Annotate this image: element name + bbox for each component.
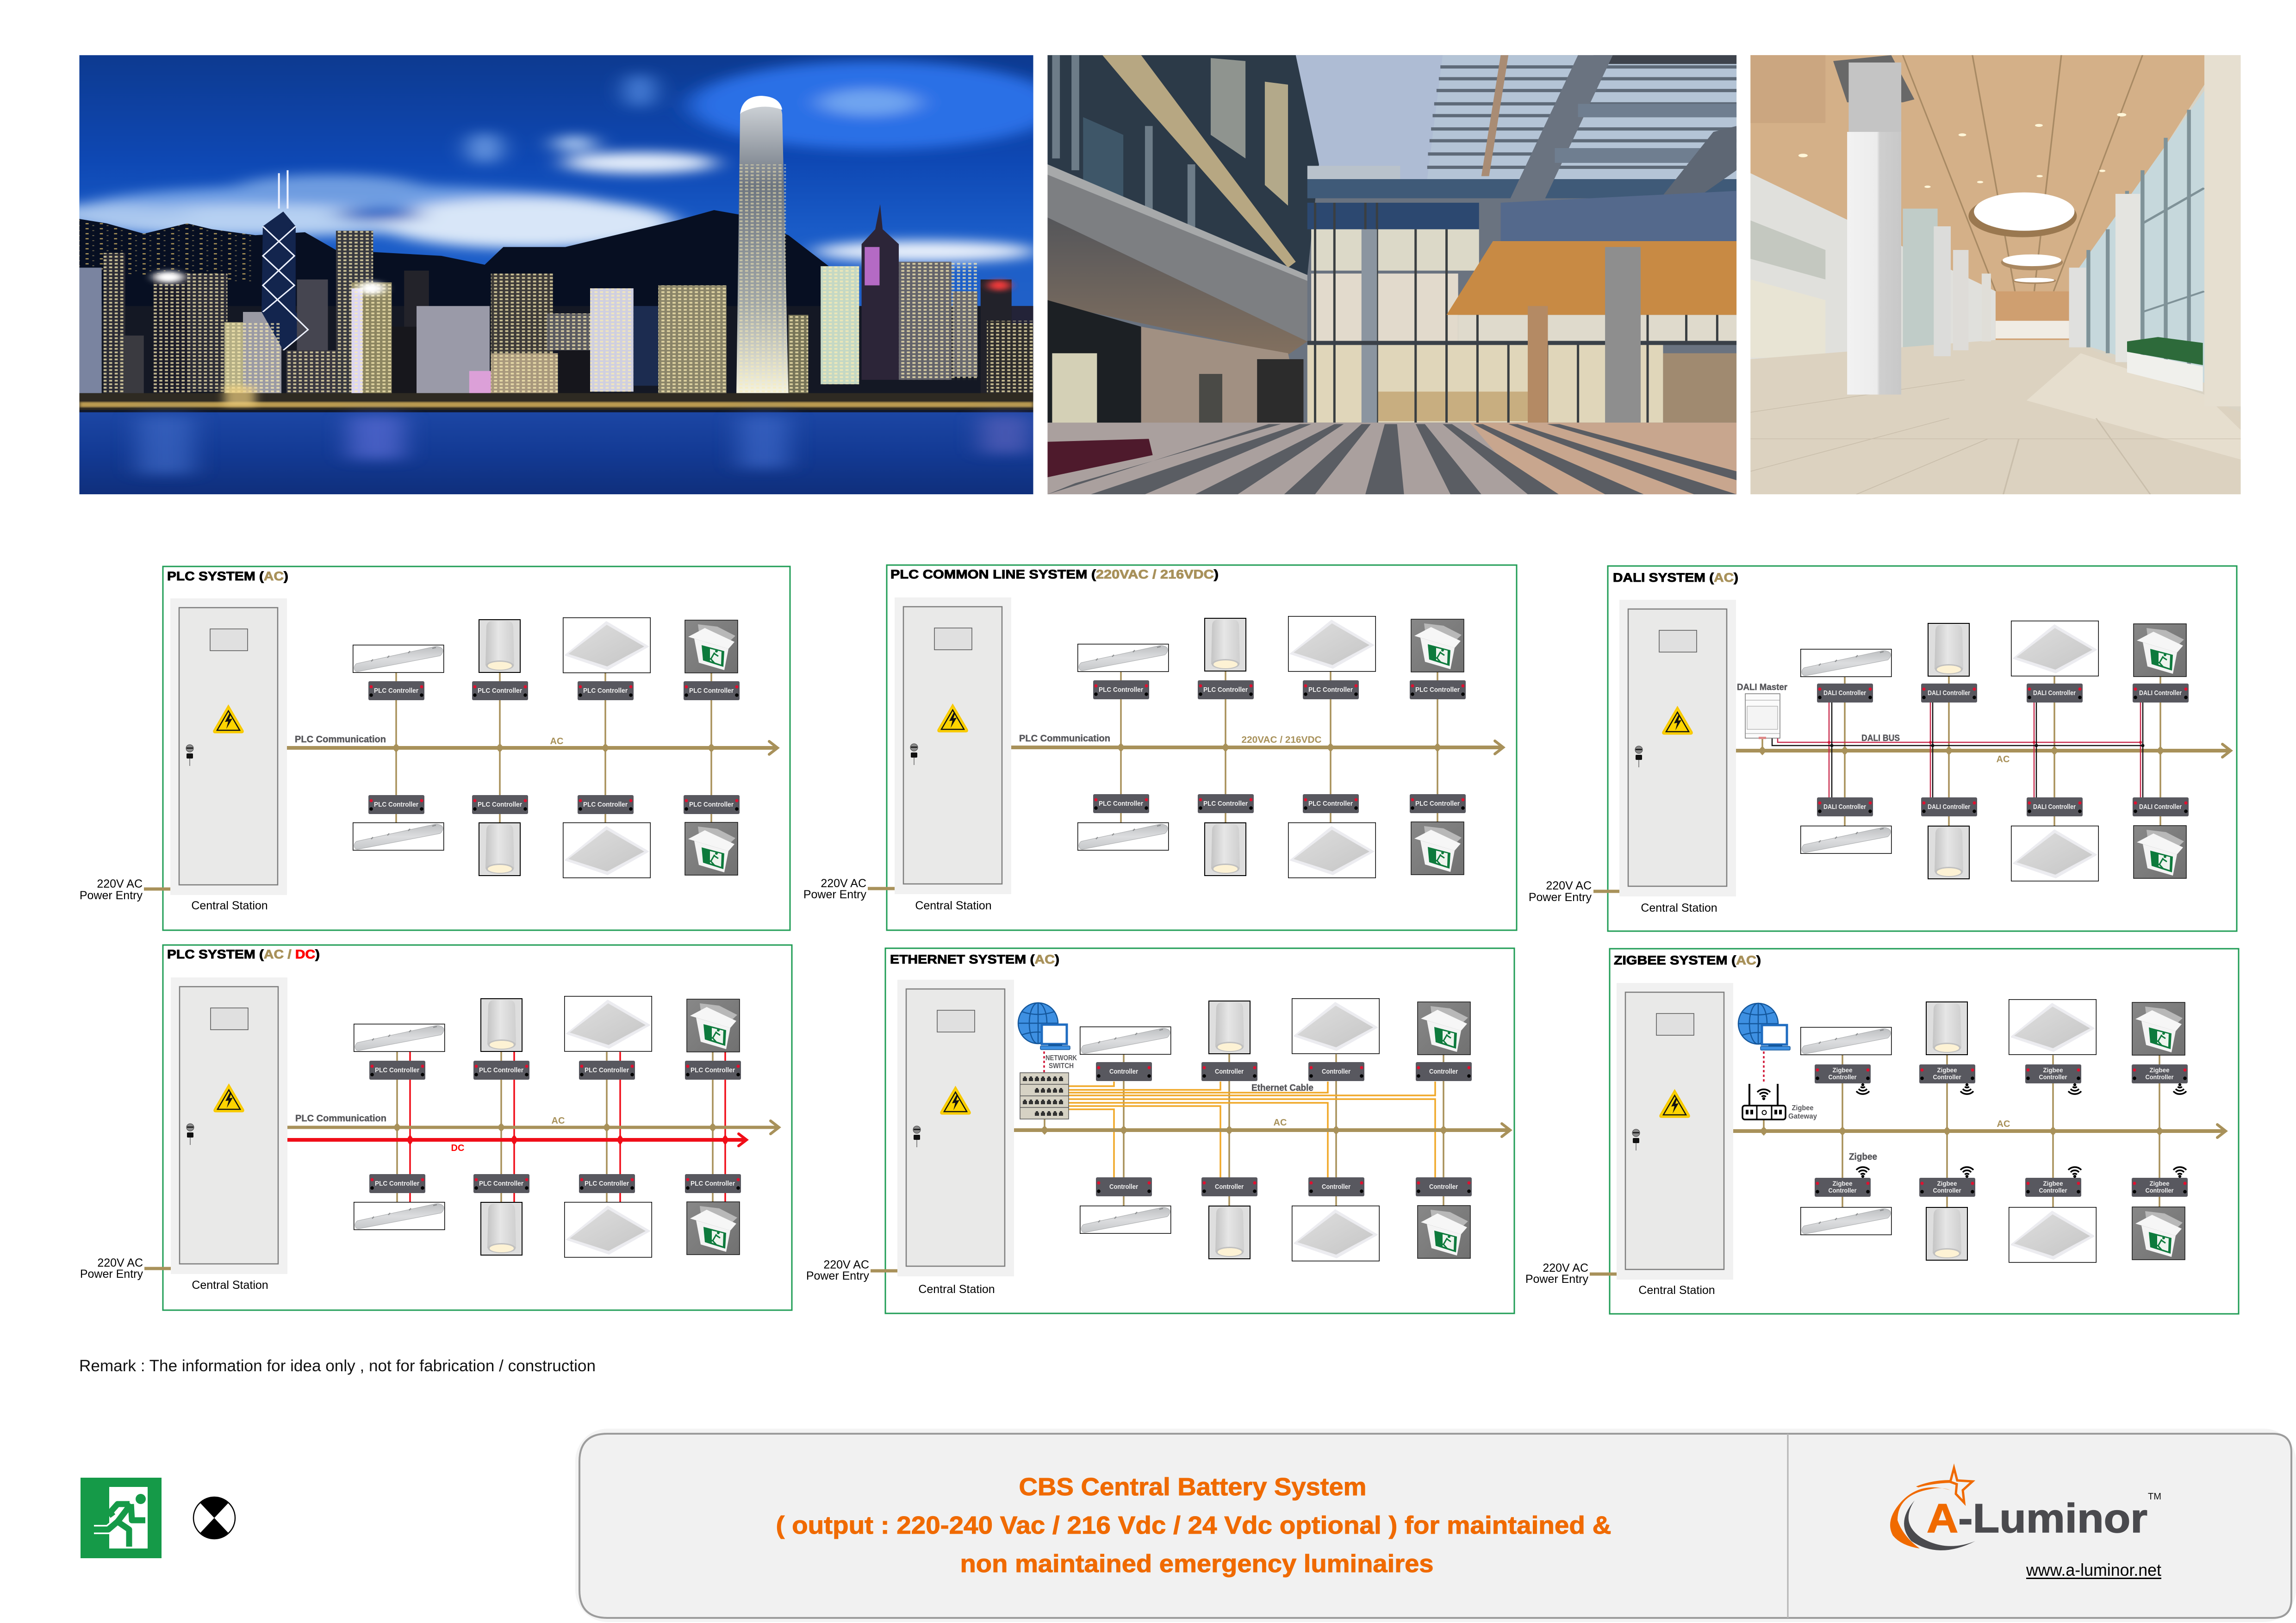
controllers top row: Controller <box>2039 1073 2067 1081</box>
controllers top row: DALI Controller <box>1928 689 1970 697</box>
power entry: 220V AC <box>821 877 866 890</box>
controllers top row: Zigbee <box>2149 1066 2170 1074</box>
controllers bottom row <box>1815 1178 2188 1197</box>
heading: PLC COMMON LINE SYSTEM ( 220VAC / 216VDC ) <box>890 567 1219 581</box>
controllers top row: Controller <box>1429 1068 1458 1076</box>
controllers top row: Controller <box>1933 1073 1961 1081</box>
wireless icons top row <box>1856 1084 2186 1094</box>
label: network switch: SWITCH <box>1049 1062 1074 1070</box>
footer banner <box>575 1429 2296 1622</box>
bus label: AC: AC <box>1274 1118 1287 1128</box>
central station cabinet <box>895 597 1011 894</box>
heading: DALI SYSTEM ( AC) <box>1613 571 1738 585</box>
controllers top row: PLC Controller <box>479 1066 523 1074</box>
controllers top row <box>369 1061 741 1080</box>
bus label: DC: DC <box>451 1143 464 1153</box>
luminaires bottom row <box>1801 1207 2185 1262</box>
power entry: Power Entry <box>1529 891 1592 904</box>
icon: emergency luminaire symbol <box>193 1497 235 1539</box>
controllers top row: PLC Controller <box>691 1066 735 1074</box>
controllers top row: PLC Controller <box>585 1066 629 1074</box>
controllers bottom row: PLC Controller <box>1308 800 1353 808</box>
logo: A-Luminor <box>1890 1468 2161 1550</box>
central station cabinet <box>1619 600 1736 896</box>
remark: Remark : The information for idea only , not for fabrication / construction <box>79 1357 596 1375</box>
power entry: Power Entry <box>80 889 143 902</box>
controllers bottom row: PLC Controller <box>1415 800 1460 808</box>
luminaires top row <box>353 618 738 673</box>
central station cabinet <box>170 598 287 895</box>
controllers top row: PLC Controller <box>478 687 522 695</box>
luminaires top row <box>1801 621 2186 677</box>
label: network switch: NETWORK <box>1045 1054 1077 1062</box>
wiring: AC bus and drops <box>287 673 778 822</box>
panel: DALI system <box>1529 566 2237 931</box>
gateway link <box>1763 1051 1765 1083</box>
controllers bottom row: PLC Controller <box>689 801 734 808</box>
power entry: 220V AC <box>97 1256 143 1269</box>
bus label: AC: AC <box>550 736 563 746</box>
controllers bottom row: PLC Controller <box>583 801 628 808</box>
controllers bottom row <box>368 795 740 814</box>
website: www.a-luminor.net <box>2026 1561 2162 1579</box>
bus label: voltage: 220VAC / 216VDC <box>1241 735 1322 745</box>
controllers bottom row: DALI Controller <box>2139 803 2182 811</box>
luminaires bottom row <box>1080 1206 1470 1261</box>
wiring: AC bus and drops <box>1733 1055 2226 1207</box>
controllers top row: Controller <box>1322 1068 1350 1076</box>
icon: network switch <box>1020 1073 1069 1119</box>
logo: A-Luminor: A-Luminor <box>1927 1495 2147 1541</box>
controllers bottom row: Zigbee <box>2149 1180 2170 1187</box>
network link <box>1043 1051 1045 1072</box>
controllers bottom row: Controller <box>2039 1187 2067 1194</box>
banner text: CBS Central Battery System <box>1019 1473 1366 1501</box>
power entry: 220V AC <box>823 1258 869 1271</box>
bus label: AC: AC <box>1997 1119 2010 1129</box>
power entry <box>80 877 170 902</box>
power entry: 220V AC <box>97 877 143 890</box>
controllers top row: Controller <box>1215 1068 1244 1076</box>
controllers top row: PLC Controller <box>1099 686 1143 694</box>
controllers top row: PLC Controller <box>1415 686 1460 694</box>
luminaires top row <box>354 996 740 1052</box>
bus label: AC: AC <box>1997 754 2010 765</box>
bus label: PLC communication: PLC Communication <box>1019 734 1110 744</box>
icon: globe with computer <box>1018 1003 1070 1050</box>
controllers bottom row <box>1817 797 2189 816</box>
controllers bottom row: PLC Controller <box>479 1180 523 1188</box>
banner text: ( output : 220-240 Vac / 216 Vdc / 24 Vdc optional ) for maintained & <box>776 1511 1612 1539</box>
power entry <box>806 1258 897 1282</box>
central station cabinet <box>897 980 1014 1276</box>
controllers bottom row: DALI Controller <box>1928 803 1970 811</box>
power entry: Power Entry <box>803 888 866 901</box>
controllers bottom row: Controller <box>1828 1187 1857 1194</box>
label: Zigbee gateway: Zigbee <box>1792 1104 1814 1112</box>
controllers top row: PLC Controller <box>689 687 734 695</box>
controllers top row: Zigbee <box>2043 1066 2063 1074</box>
controllers bottom row: Zigbee <box>2043 1180 2063 1187</box>
controllers bottom row: Zigbee <box>1833 1180 1853 1187</box>
cabinet caption: Central Station <box>915 899 992 912</box>
controllers bottom row: Controller <box>1215 1183 1244 1191</box>
bus label: PLC communication: PLC Communication <box>295 734 386 745</box>
controllers bottom row: PLC Controller <box>1203 800 1248 808</box>
controllers top row: Controller <box>1828 1073 1857 1081</box>
photo: interior lobby <box>1750 55 2241 494</box>
panel: Ethernet system <box>806 948 1514 1313</box>
banner text: non maintained emergency luminaires <box>960 1550 1434 1578</box>
luminaires bottom row <box>353 822 738 878</box>
controllers top row <box>1096 1062 1472 1081</box>
controllers top row: PLC Controller <box>375 1066 419 1074</box>
cabinet caption: Central Station <box>191 899 268 912</box>
controllers top row <box>1817 684 2189 703</box>
luminaires top row <box>1078 616 1464 672</box>
controllers bottom row: DALI Controller <box>2033 803 2076 811</box>
controllers top row: DALI Controller <box>2033 689 2076 697</box>
cabinet caption: Central Station <box>192 1279 268 1292</box>
controllers bottom row: Controller <box>1429 1183 1458 1191</box>
power entry <box>80 1256 171 1281</box>
icon: globe with computer <box>1738 1003 1790 1050</box>
controllers bottom row: PLC Controller <box>374 801 418 808</box>
wiring: AC and DC buses <box>287 1052 779 1202</box>
controllers top row: Controller <box>1109 1068 1138 1076</box>
panel: PLC common line system <box>803 565 1517 930</box>
luminaires top row <box>1801 1000 2185 1055</box>
banner text <box>776 1473 1612 1578</box>
controllers bottom row: Controller <box>1109 1183 1138 1191</box>
controllers bottom row: PLC Controller <box>375 1180 419 1188</box>
power entry <box>1529 879 1619 904</box>
wiring: DALI bus and AC bus <box>1736 677 2231 826</box>
label: Zigbee gateway: Gateway <box>1788 1113 1817 1120</box>
controllers top row: PLC Controller <box>1308 686 1353 694</box>
controllers bottom row: PLC Controller <box>478 801 522 808</box>
bus label: DALI BUS: DALI BUS <box>1861 734 1900 743</box>
controllers bottom row <box>1096 1177 1472 1196</box>
heading: PLC SYSTEM ( AC / DC) <box>167 947 320 961</box>
controllers top row: PLC Controller <box>1203 686 1248 694</box>
controllers bottom row <box>369 1174 741 1193</box>
controllers bottom row: Controller <box>1933 1187 1961 1194</box>
panel: PLC system AC <box>80 566 790 930</box>
wiring: ethernet cables and AC bus <box>1014 1054 1510 1206</box>
power entry: 220V AC <box>1543 1262 1588 1275</box>
controllers bottom row: PLC Controller <box>691 1180 735 1188</box>
central station cabinet <box>171 977 287 1274</box>
power entry: Power Entry <box>1525 1273 1588 1286</box>
cabinet caption: Central Station <box>1638 1284 1715 1297</box>
controllers bottom row: Controller <box>2146 1187 2174 1194</box>
power entry <box>1525 1262 1617 1286</box>
controllers bottom row <box>1093 794 1466 813</box>
controllers top row: DALI Controller <box>1823 689 1866 697</box>
photo: Hong Kong night skyline <box>32 55 1061 494</box>
icon: exit sign <box>81 1478 162 1558</box>
controllers top row <box>368 681 740 700</box>
controllers top row: Zigbee <box>1833 1066 1853 1074</box>
cable label: Ethernet Cable <box>1251 1083 1313 1093</box>
heading: ZIGBEE SYSTEM ( AC) <box>1614 953 1761 967</box>
controllers top row: PLC Controller <box>374 687 418 695</box>
controllers top row: DALI Controller <box>2139 689 2182 697</box>
controllers bottom row: PLC Controller <box>585 1180 629 1188</box>
controllers top row <box>1815 1064 2188 1083</box>
label: Zigbee gateway <box>1788 1104 1817 1120</box>
power entry: Power Entry <box>80 1268 143 1281</box>
controllers bottom row: DALI Controller <box>1823 803 1866 811</box>
controllers bottom row: PLC Controller <box>1099 800 1143 808</box>
wireless icons bottom row <box>1856 1167 2186 1177</box>
controllers bottom row: Zigbee <box>1937 1180 1957 1187</box>
cabinet caption: Central Station <box>1641 902 1717 914</box>
panel: PLC system AC / DC <box>80 945 792 1310</box>
cabinet caption: Central Station <box>918 1283 995 1296</box>
controllers top row: Zigbee <box>1937 1066 1957 1074</box>
luminaires bottom row <box>1801 826 2186 881</box>
heading: ETHERNET SYSTEM ( AC) <box>890 952 1059 966</box>
controllers top row: PLC Controller <box>583 687 628 695</box>
central station cabinet <box>1617 983 1733 1280</box>
wiring: common line bus and drops <box>1011 672 1503 822</box>
DALI master module: DALI Master <box>1737 683 1788 692</box>
label: Zigbee: Zigbee <box>1849 1152 1877 1162</box>
controllers bottom row: Controller <box>1322 1183 1350 1191</box>
luminaires bottom row <box>354 1202 740 1257</box>
luminaires top row <box>1080 999 1470 1055</box>
controllers top row <box>1093 680 1466 699</box>
luminaires bottom row <box>1078 822 1464 878</box>
logo: A-Luminor: TM <box>2148 1492 2161 1502</box>
bus label: PLC communication: PLC Communication <box>295 1113 386 1124</box>
heading: PLC SYSTEM ( AC) <box>167 569 288 583</box>
power entry: 220V AC <box>1546 879 1592 892</box>
panel: Zigbee system <box>1525 949 2239 1314</box>
icon: Zigbee gateway router <box>1742 1084 1786 1119</box>
bus label: AC: AC <box>552 1116 565 1126</box>
power entry <box>803 877 895 901</box>
label: network switch <box>1045 1054 1077 1070</box>
photo: building courtyard exterior <box>1047 55 1736 494</box>
controllers top row: Controller <box>2146 1073 2174 1081</box>
power entry: Power Entry <box>806 1269 869 1282</box>
DALI master module <box>1737 683 1788 739</box>
